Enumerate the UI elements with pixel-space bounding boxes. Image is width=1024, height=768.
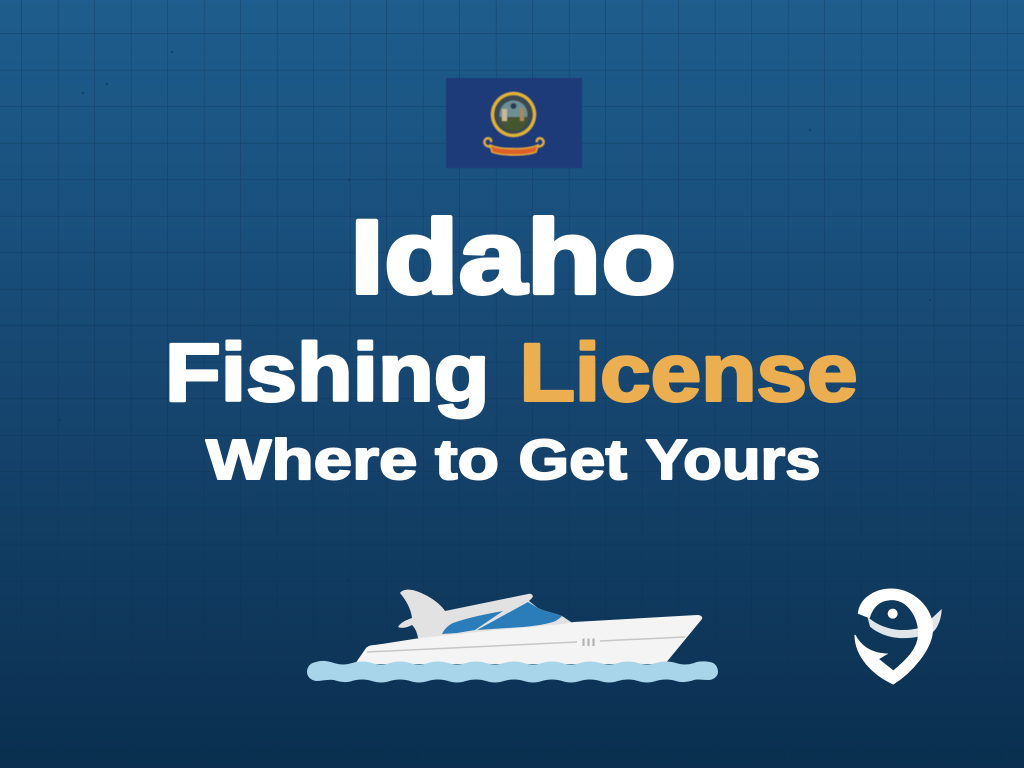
- yacht windows: [442, 602, 562, 634]
- hull vents: [584, 638, 594, 646]
- icon: state motto scroll: [484, 138, 544, 155]
- heading: Fishing License: [165, 328, 858, 418]
- subheading: Where to Get Yours: [206, 428, 820, 492]
- logo eye: [888, 609, 898, 619]
- logo band and tail: [867, 609, 942, 638]
- water waves: [307, 661, 718, 682]
- logo fish hook body: [855, 589, 933, 684]
- subheading: Where to Get Yours: Where: [206, 428, 418, 492]
- icon: state seal: [491, 92, 536, 137]
- heading: Fishing License: Fishing: [165, 328, 490, 418]
- subheading: Where to Get Yours: Yours: [646, 428, 820, 492]
- title: Idaho: Idaho: [350, 199, 676, 316]
- subheading: Where to Get Yours: to: [435, 428, 499, 492]
- yacht cabin: [398, 590, 574, 640]
- icon: fish and hook logo: [855, 589, 942, 684]
- heading: Fishing License: License: [520, 328, 858, 418]
- icon: motor yacht on water: [307, 590, 718, 682]
- yacht hull: [355, 615, 702, 664]
- icon: Idaho state flag: [446, 78, 582, 168]
- subheading: Where to Get Yours: Get: [518, 428, 627, 492]
- hull stripe: [367, 637, 685, 652]
